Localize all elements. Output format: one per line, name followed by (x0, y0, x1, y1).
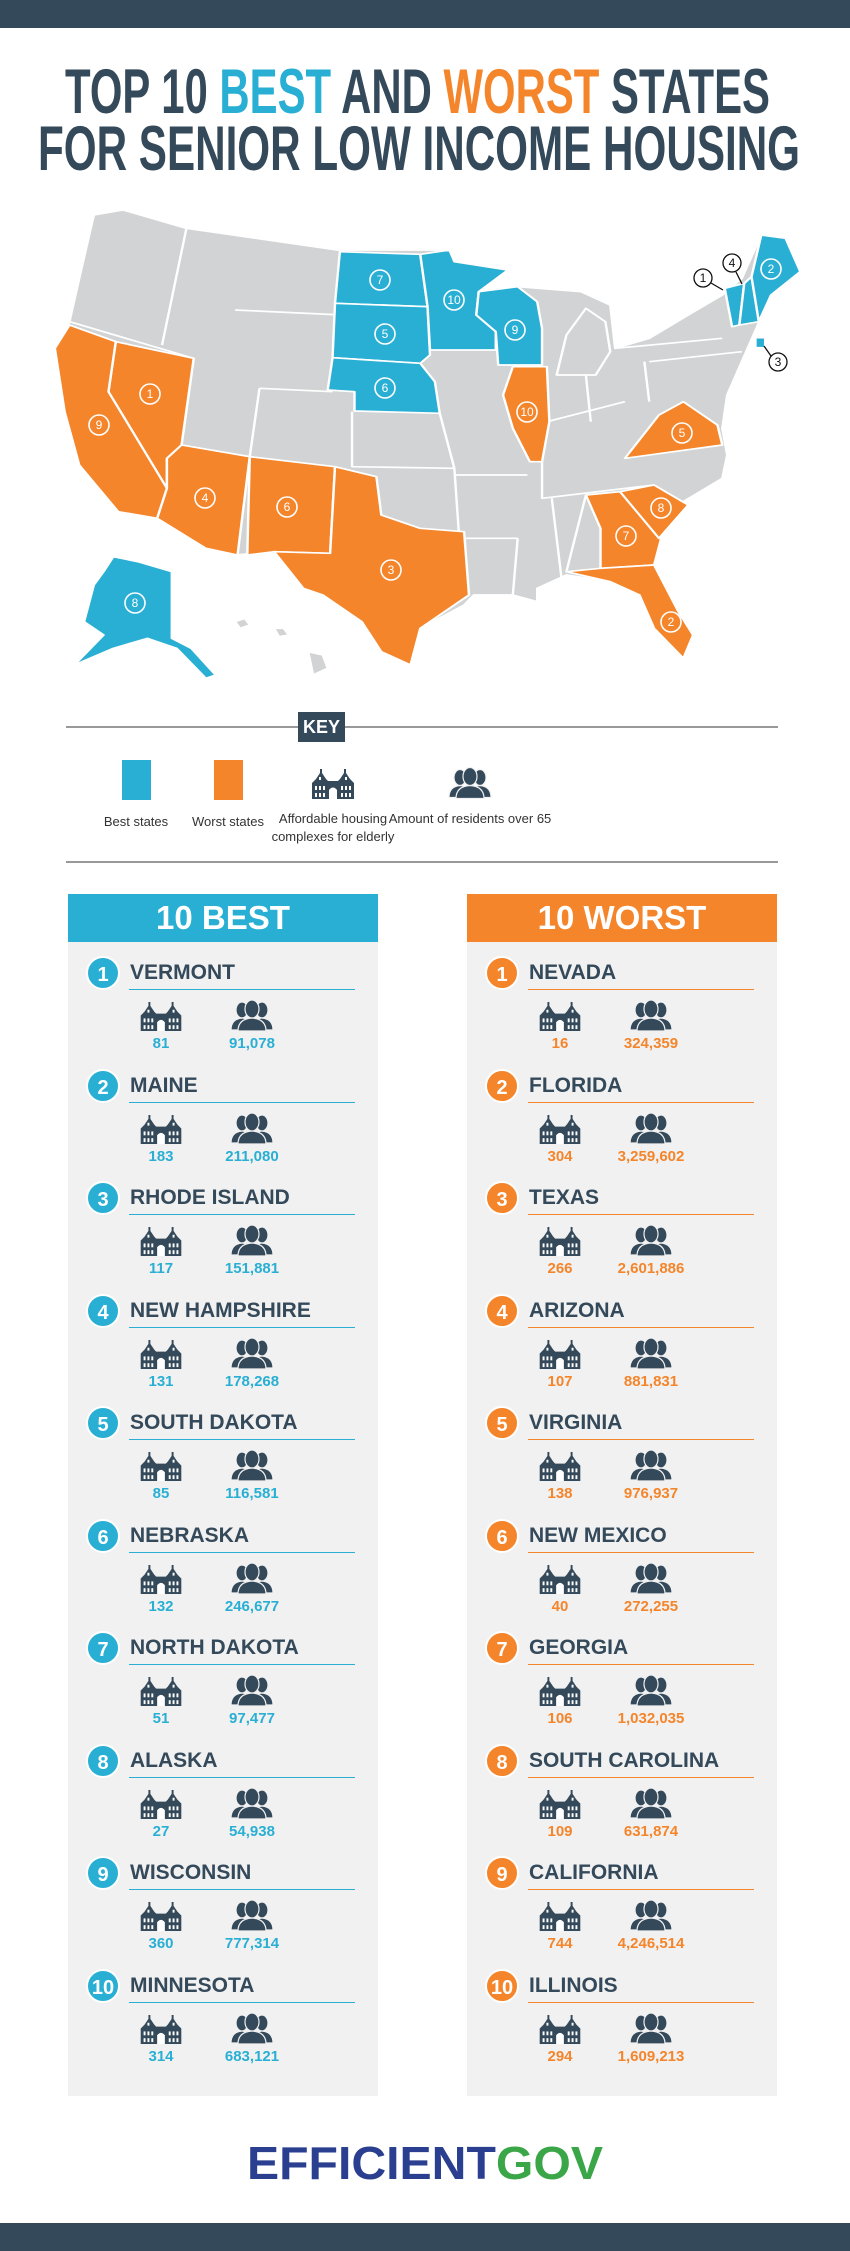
panel: 10 best: 2 (97, 1076, 109, 1098)
panel: 10 best: 314 (148, 2048, 174, 2064)
panel: 10 worst: 324,359 (624, 1035, 678, 1052)
panel: 10 best: 132 (148, 1598, 174, 1614)
key label (298, 712, 345, 742)
map number labels: 6 (382, 381, 389, 395)
heading: 10 best (68, 894, 378, 942)
panel: 10 worst: 106 (547, 1710, 573, 1727)
key label: KEY (303, 717, 340, 737)
panel: 10 best: SOUTH DAKOTA (130, 1411, 298, 1434)
panel: 10 worst: TEXAS (529, 1186, 599, 1209)
panel: 10 worst: 8 (496, 1752, 508, 1774)
map number labels: 9 (512, 323, 519, 337)
panel: 10 worst: 3,259,602 (618, 1148, 684, 1164)
map number labels: 10 (447, 293, 461, 307)
map number labels: 1 (147, 387, 154, 401)
panel: 10 worst: 266 (547, 1260, 573, 1277)
map number labels: 4 (729, 256, 736, 270)
panel: 10 best: MINNESOTA (130, 1974, 254, 1996)
panel: 10 worst: GEORGIA (529, 1636, 628, 1659)
key (66, 712, 778, 863)
panel: 10 best: 211,080 (225, 1148, 279, 1164)
panel: 10 worst: 1 (496, 964, 508, 986)
panel: 10 worst: ARIZONA (529, 1298, 625, 1322)
map number labels: 4 (202, 491, 209, 505)
panel: 10 best: 777,314 (225, 1935, 279, 1952)
panel: 10 worst: 4,246,514 (618, 1935, 684, 1952)
panel: 10 best: 183 (148, 1148, 174, 1164)
panel: 10 worst: 109 (547, 1822, 573, 1840)
panel: 10 best: VERMONT (130, 961, 235, 984)
panel: 10 worst: 631,874 (624, 1822, 678, 1840)
panel: 10 best: 178,268 (225, 1372, 279, 1390)
panel: 10 worst: 16 (552, 1035, 568, 1052)
panel: 10 worst: 10 (491, 1976, 513, 1998)
panel: 10 best: NEBRASKA (130, 1524, 249, 1546)
panel: 10 worst: 4 (496, 1302, 508, 1324)
panel: 10 best: NORTH DAKOTA (130, 1636, 299, 1659)
key: best swatch (104, 760, 168, 829)
panel: 10 worst: 976,937 (624, 1485, 678, 1502)
panel: 10 worst: NEVADA (529, 961, 616, 984)
panel: 10 worst: 272,255 (624, 1598, 678, 1614)
map number labels: 3 (775, 355, 782, 369)
panel: 10 worst: 2 (496, 1076, 508, 1098)
panel: 10 worst: 138 (547, 1485, 573, 1502)
panel: 10 worst: 107 (547, 1372, 573, 1390)
panel: 10 best: 360 (148, 1935, 174, 1952)
key: residents icon (388, 767, 551, 826)
panel: 10 worst: 744 (547, 1935, 573, 1952)
panel: 10 best: 8 (97, 1752, 109, 1774)
panel: 10 best: ALASKA (130, 1748, 218, 1772)
panel: 10 best: WISCONSIN (130, 1861, 251, 1884)
panel: 10 best: 6 (97, 1526, 109, 1548)
panel: 10 best: 91,078 (229, 1035, 275, 1052)
panel: 10 best: NEW HAMPSHIRE (130, 1298, 311, 1322)
map number labels (88, 253, 788, 633)
heading: 10 worst: 10 WORST (538, 899, 706, 936)
panel: 10 worst (467, 894, 777, 2096)
footer logo: EFFICIENTGOV (247, 2137, 603, 2189)
heading: 10 worst (467, 894, 777, 942)
map number labels: 2 (668, 615, 675, 629)
panel: 10 best: 10 (92, 1976, 114, 1998)
panel: 10 best: 7 (97, 1639, 109, 1661)
panel: 10 worst: 1,032,035 (618, 1710, 684, 1727)
panel: 10 best: 54,938 (229, 1822, 275, 1840)
heading: 10 best: 10 BEST (156, 899, 290, 936)
map number labels: 8 (658, 501, 665, 515)
panel: 10 best: MAINE (130, 1074, 198, 1096)
map number labels: 9 (96, 418, 103, 432)
panel: 10 worst: 881,831 (624, 1372, 678, 1390)
panel: 10 best: 85 (153, 1485, 169, 1502)
title (38, 60, 800, 180)
map number labels: 5 (679, 426, 686, 440)
panel: 10 worst: 3 (496, 1189, 508, 1211)
panel: 10 worst: 6 (496, 1526, 508, 1548)
panel: 10 best: 27 (153, 1822, 169, 1840)
map number labels: 8 (132, 596, 139, 610)
map number labels: 10 (520, 405, 534, 419)
bottom bar (0, 2223, 850, 2251)
panel: 10 best: 81 (153, 1035, 169, 1052)
panel: 10 best: 246,677 (225, 1598, 279, 1614)
panel: 10 best: 51 (153, 1710, 169, 1727)
map number labels: 5 (382, 327, 389, 341)
panel: 10 best: 1 (97, 964, 109, 986)
panel: 10 best: 151,881 (225, 1260, 279, 1277)
key: housing icon (272, 769, 394, 844)
panel: 10 worst: 40 (552, 1598, 568, 1614)
key: worst swatch (192, 760, 264, 829)
panel: 10 worst: VIRGINIA (529, 1411, 622, 1434)
map number labels: 7 (623, 529, 630, 543)
panel: 10 worst: 7 (496, 1639, 508, 1661)
map number labels: 6 (284, 500, 291, 514)
panel: 10 worst: 1,609,213 (618, 2048, 684, 2064)
map number labels: 3 (388, 563, 395, 577)
panel: 10 best (68, 894, 378, 2096)
panel: 10 best: 4 (97, 1302, 109, 1324)
panel: 10 best: 97,477 (229, 1710, 275, 1727)
key: housing icon: Affordable housing (279, 811, 387, 826)
panel: 10 best: 5 (97, 1414, 109, 1436)
panel: 10 best: 683,121 (225, 2048, 279, 2064)
panel: 10 best: 9 (97, 1864, 109, 1886)
map (56, 210, 799, 678)
top bar (0, 0, 850, 28)
panel: 10 worst: 304 (547, 1148, 573, 1164)
panel: 10 worst: 5 (496, 1414, 508, 1436)
map number labels: 1 (700, 271, 707, 285)
map number labels: 2 (768, 262, 775, 276)
panel: 10 worst: FLORIDA (529, 1074, 622, 1096)
panel: 10 best: 117 (149, 1260, 173, 1277)
key: worst swatch: Worst states (192, 814, 264, 829)
panel: 10 worst: SOUTH CAROLINA (529, 1748, 719, 1772)
panel: 10 worst: CALIFORNIA (529, 1861, 658, 1884)
panel: 10 best: 3 (97, 1189, 109, 1211)
map number labels: 7 (377, 273, 384, 287)
panel: 10 worst: 2,601,886 (618, 1260, 684, 1277)
panel: 10 worst: 294 (547, 2048, 573, 2064)
panel: 10 best: 116,581 (225, 1485, 279, 1502)
panel: 10 best: RHODE ISLAND (130, 1186, 290, 1209)
panel: 10 worst: ILLINOIS (529, 1974, 618, 1996)
panel: 10 best: 131 (148, 1372, 174, 1390)
key: residents icon: Amount of residents over 65 (389, 811, 551, 826)
panel: 10 worst: 9 (496, 1864, 508, 1886)
panel: 10 worst: NEW MEXICO (529, 1524, 667, 1546)
key: best swatch: Best states (104, 814, 168, 829)
key: housing icon: complexes for elderly (272, 829, 394, 844)
